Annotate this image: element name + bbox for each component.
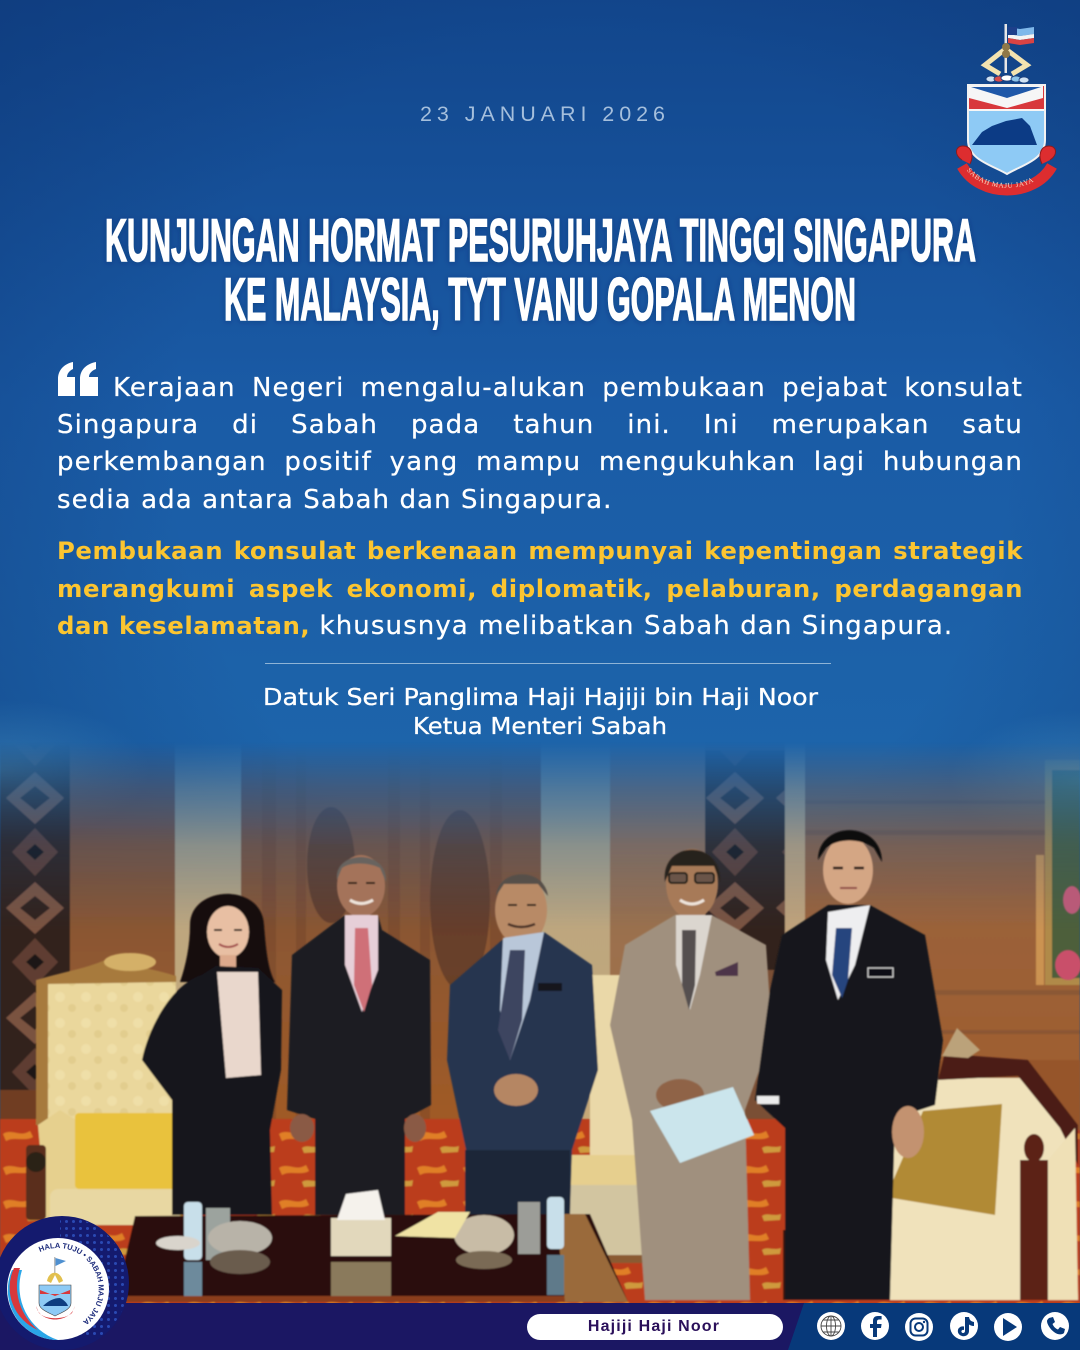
quote paragraph 1: Singapura di Sabah pada tahun ini. Ini merupakan satu xyxy=(57,410,1023,440)
quote paragraph 2 with highlight: merangkumi aspek ekonomi, diplomatik, pelaburan, perdagangan xyxy=(57,574,1023,603)
quote paragraph 1: Kerajaan Negeri mengalu-alukan pembukaan pejabat konsulat xyxy=(113,373,1023,403)
attribution: Ketua Menteri Sabah xyxy=(413,712,667,740)
quote paragraph 2 with highlight: dan keselamatan, khususnya melibatkan Sabah dan Singapura. xyxy=(57,611,953,641)
icon: phone xyxy=(1041,1312,1069,1340)
name pill: Hajiji Haji Noor xyxy=(588,1318,720,1335)
title xyxy=(105,207,976,333)
icon: Sabah state crest xyxy=(956,24,1057,196)
social icons xyxy=(817,1312,1069,1341)
quote paragraph 2 with highlight: Pembukaan konsulat berkenaan mempunyai kepentingan strategik xyxy=(57,536,1023,565)
crest motto: SABAH MAJU JAYA xyxy=(967,168,1034,188)
person 4 xyxy=(666,849,718,919)
person 2 xyxy=(337,855,385,917)
icon: quotation mark xyxy=(58,362,98,396)
quote paragraph 1: sedia ada antara Sabah dan Singapura. xyxy=(57,485,613,515)
name pill xyxy=(527,1314,783,1340)
icon: globe xyxy=(817,1312,845,1340)
quote paragraph 1 xyxy=(57,373,1023,515)
badge text: HALA TUJU • SABAH MAJU JAYA xyxy=(38,1242,104,1324)
person 5 xyxy=(823,836,873,904)
circular logo badge: Hala Tuju Sabah Maju Jaya xyxy=(0,1216,129,1350)
centre chair xyxy=(590,975,640,1165)
quote paragraph 2 with highlight xyxy=(57,536,1023,641)
attribution xyxy=(263,683,818,740)
attribution: Datuk Seri Panglima Haji Hajiji bin Haji Noor xyxy=(263,683,818,711)
table xyxy=(115,1214,628,1302)
photo: furniture and people xyxy=(0,830,1080,1309)
footer bar xyxy=(0,1303,1080,1350)
right sofa xyxy=(836,1078,1078,1300)
divider line xyxy=(265,663,831,664)
icon: facebook xyxy=(861,1312,889,1340)
badge crest xyxy=(36,1257,75,1320)
photo: room wall fading into blue xyxy=(0,730,1080,1310)
person 1 xyxy=(180,894,275,982)
icon: instagram xyxy=(905,1313,933,1341)
left armchair xyxy=(44,978,176,1223)
icon: play xyxy=(994,1313,1022,1341)
icon: tiktok xyxy=(950,1312,978,1340)
quote paragraph 1: perkembangan positif yang mampu mengukuhkan lagi hubungan xyxy=(57,447,1023,477)
carpet xyxy=(0,1119,1080,1309)
person 3 xyxy=(495,875,547,945)
date: 23 JANUARI 2026 xyxy=(420,102,670,126)
